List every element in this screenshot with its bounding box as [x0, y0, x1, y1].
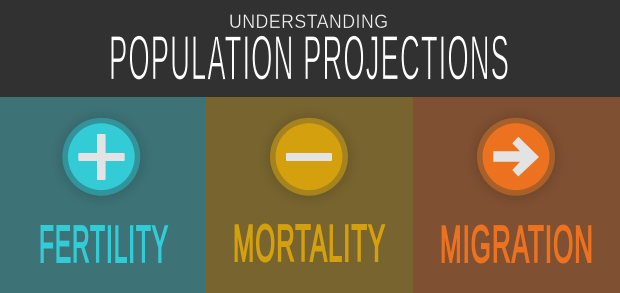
panel: mortality: MORTALITY	[233, 215, 386, 273]
icon: arrow in circle	[477, 118, 555, 196]
header band	[0, 0, 620, 97]
panel: migration	[413, 97, 620, 293]
panel: fertility: FERTILITY	[39, 216, 169, 274]
icon: minus in circle	[270, 118, 348, 196]
heading: understanding: UNDERSTANDING	[229, 12, 388, 33]
panel: mortality	[206, 97, 413, 293]
icon: plus in circle	[62, 118, 140, 196]
panel: fertility	[0, 97, 206, 293]
